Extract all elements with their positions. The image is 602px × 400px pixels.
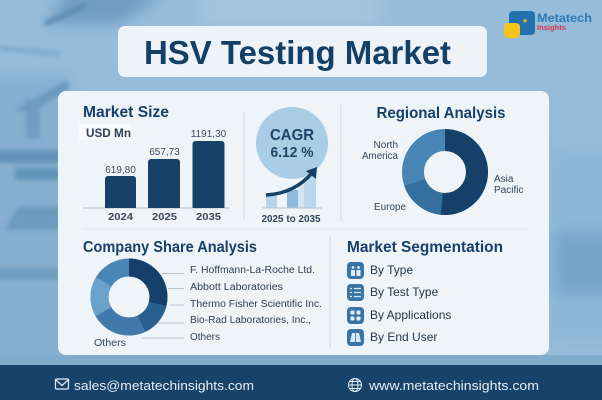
item: By Test Type bbox=[347, 284, 439, 301]
bar 2035: 2035 bbox=[196, 211, 221, 223]
heading: Market Segmentation: Market Segmentation bbox=[347, 239, 503, 256]
item: By Type bbox=[347, 262, 413, 279]
CAGR circle: CAGR bbox=[270, 127, 314, 144]
heading: Regional Analysis: Regional Analysis bbox=[376, 105, 506, 122]
panel: regional analysis bbox=[362, 105, 523, 213]
logo subline: Insights bbox=[537, 23, 566, 32]
bar 2025 bbox=[148, 147, 180, 223]
email contact: sales@metatechinsights.com bbox=[74, 378, 254, 393]
arrow: growth bbox=[266, 167, 317, 195]
item: By Applications bbox=[347, 307, 451, 324]
CAGR circle bbox=[256, 107, 328, 179]
label: Asia Pacific: Pacific bbox=[494, 185, 523, 196]
bar 2025: 2025 bbox=[152, 211, 177, 223]
CAGR circle: 6.12 % bbox=[270, 144, 314, 161]
icon: envelope bbox=[56, 379, 68, 389]
unit label: USD Mn bbox=[86, 128, 131, 140]
company legend: Bio-Rad Laboratories, Inc., bbox=[190, 315, 311, 326]
company legend: Abbott Laboratories bbox=[190, 282, 283, 293]
company legend: F. Hoffmann-La-Roche Ltd. bbox=[190, 265, 315, 276]
item: By Type: By Type bbox=[370, 263, 413, 277]
title: HSV Testing Market bbox=[144, 34, 451, 71]
bar 2024: 619,80 bbox=[105, 165, 136, 176]
panel: market size bbox=[79, 104, 230, 223]
heading: Market Size: Market Size bbox=[83, 104, 169, 121]
growth bars bbox=[262, 176, 322, 208]
unit label bbox=[79, 124, 131, 140]
donut chart: company share bbox=[100, 268, 158, 326]
company legend bbox=[190, 265, 322, 343]
panel: company share analysis bbox=[83, 239, 322, 349]
label: North America: North bbox=[374, 140, 398, 151]
bar 2025: 657,73 bbox=[149, 147, 180, 158]
item: By Applications: By Applications bbox=[370, 308, 451, 322]
company legend: Thermo Fisher Scientific Inc. bbox=[190, 299, 322, 310]
website contact: www.metatechinsights.com bbox=[368, 378, 539, 393]
panel: market segmentation bbox=[347, 239, 503, 346]
logo: Metatech Insights bbox=[504, 11, 592, 38]
donut chart: regions bbox=[413, 140, 477, 204]
item: By End User: By End User bbox=[370, 330, 437, 344]
icon: people bbox=[347, 262, 364, 279]
panel: CAGR bbox=[256, 107, 328, 225]
label: Asia Pacific: Asia bbox=[494, 174, 514, 185]
icon: globe bbox=[348, 378, 362, 392]
label: donut Others: Others bbox=[94, 338, 126, 349]
footer bar bbox=[0, 365, 602, 400]
bar 2024 bbox=[105, 165, 136, 223]
title banner bbox=[118, 26, 487, 77]
leader lines bbox=[142, 274, 184, 338]
label: Europe: Europe bbox=[374, 202, 406, 213]
bar 2035 bbox=[191, 129, 227, 223]
icon: star: ★ bbox=[522, 17, 528, 25]
CAGR period label: 2025 to 2035 bbox=[262, 213, 321, 225]
icon: grid bbox=[347, 307, 364, 324]
bar 2035: 1191,30 bbox=[191, 129, 227, 140]
item: By Test Type: By Test Type bbox=[370, 285, 439, 299]
company legend: Others bbox=[190, 332, 220, 343]
label: North America: America bbox=[362, 151, 398, 162]
main panel bbox=[58, 91, 549, 355]
icon: building bbox=[347, 329, 364, 346]
bar 2024: 2024 bbox=[108, 211, 133, 223]
heading: Company Share Analysis: Company Share Analysis bbox=[83, 239, 257, 256]
item: By End User bbox=[347, 329, 437, 346]
logo wordmark: Metatech bbox=[537, 13, 592, 25]
bar chart bbox=[83, 129, 230, 223]
icon: list bbox=[347, 284, 364, 301]
